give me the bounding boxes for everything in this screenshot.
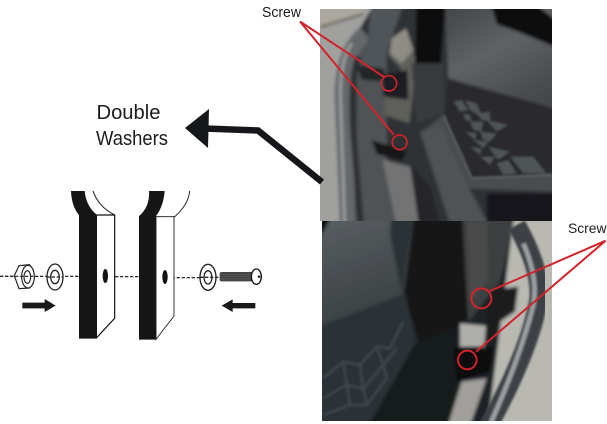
top screw label connector [300, 22, 394, 135]
arrow: right-pointing [22, 299, 56, 312]
icon: hex nut [0, 265, 34, 289]
label: top screw: Screw [262, 5, 302, 21]
arrow: left-pointing [222, 299, 255, 312]
red leader lines and screw circles [381, 76, 407, 150]
icon: right washer [200, 264, 220, 290]
red leader lines and screw circles [458, 241, 606, 369]
mesh cells [323, 322, 403, 415]
heading: double washers: Double [96, 102, 160, 124]
heading: double washers: Washers [96, 128, 168, 150]
icon: left washer [47, 264, 63, 290]
icon: bolt [220, 269, 261, 284]
photo: bottom mounting bracket [322, 221, 606, 421]
photo: top mounting bracket [320, 9, 552, 221]
left bracket plate [71, 191, 115, 339]
right bracket plate [139, 191, 190, 340]
mesh cells [453, 100, 547, 175]
exploded hardware diagram [0, 191, 261, 340]
arrow: pointing to double washers [185, 109, 322, 182]
heading: double washers [96, 102, 168, 150]
axis line [0, 276, 200, 278]
label: bottom screw: Screw [568, 220, 607, 236]
